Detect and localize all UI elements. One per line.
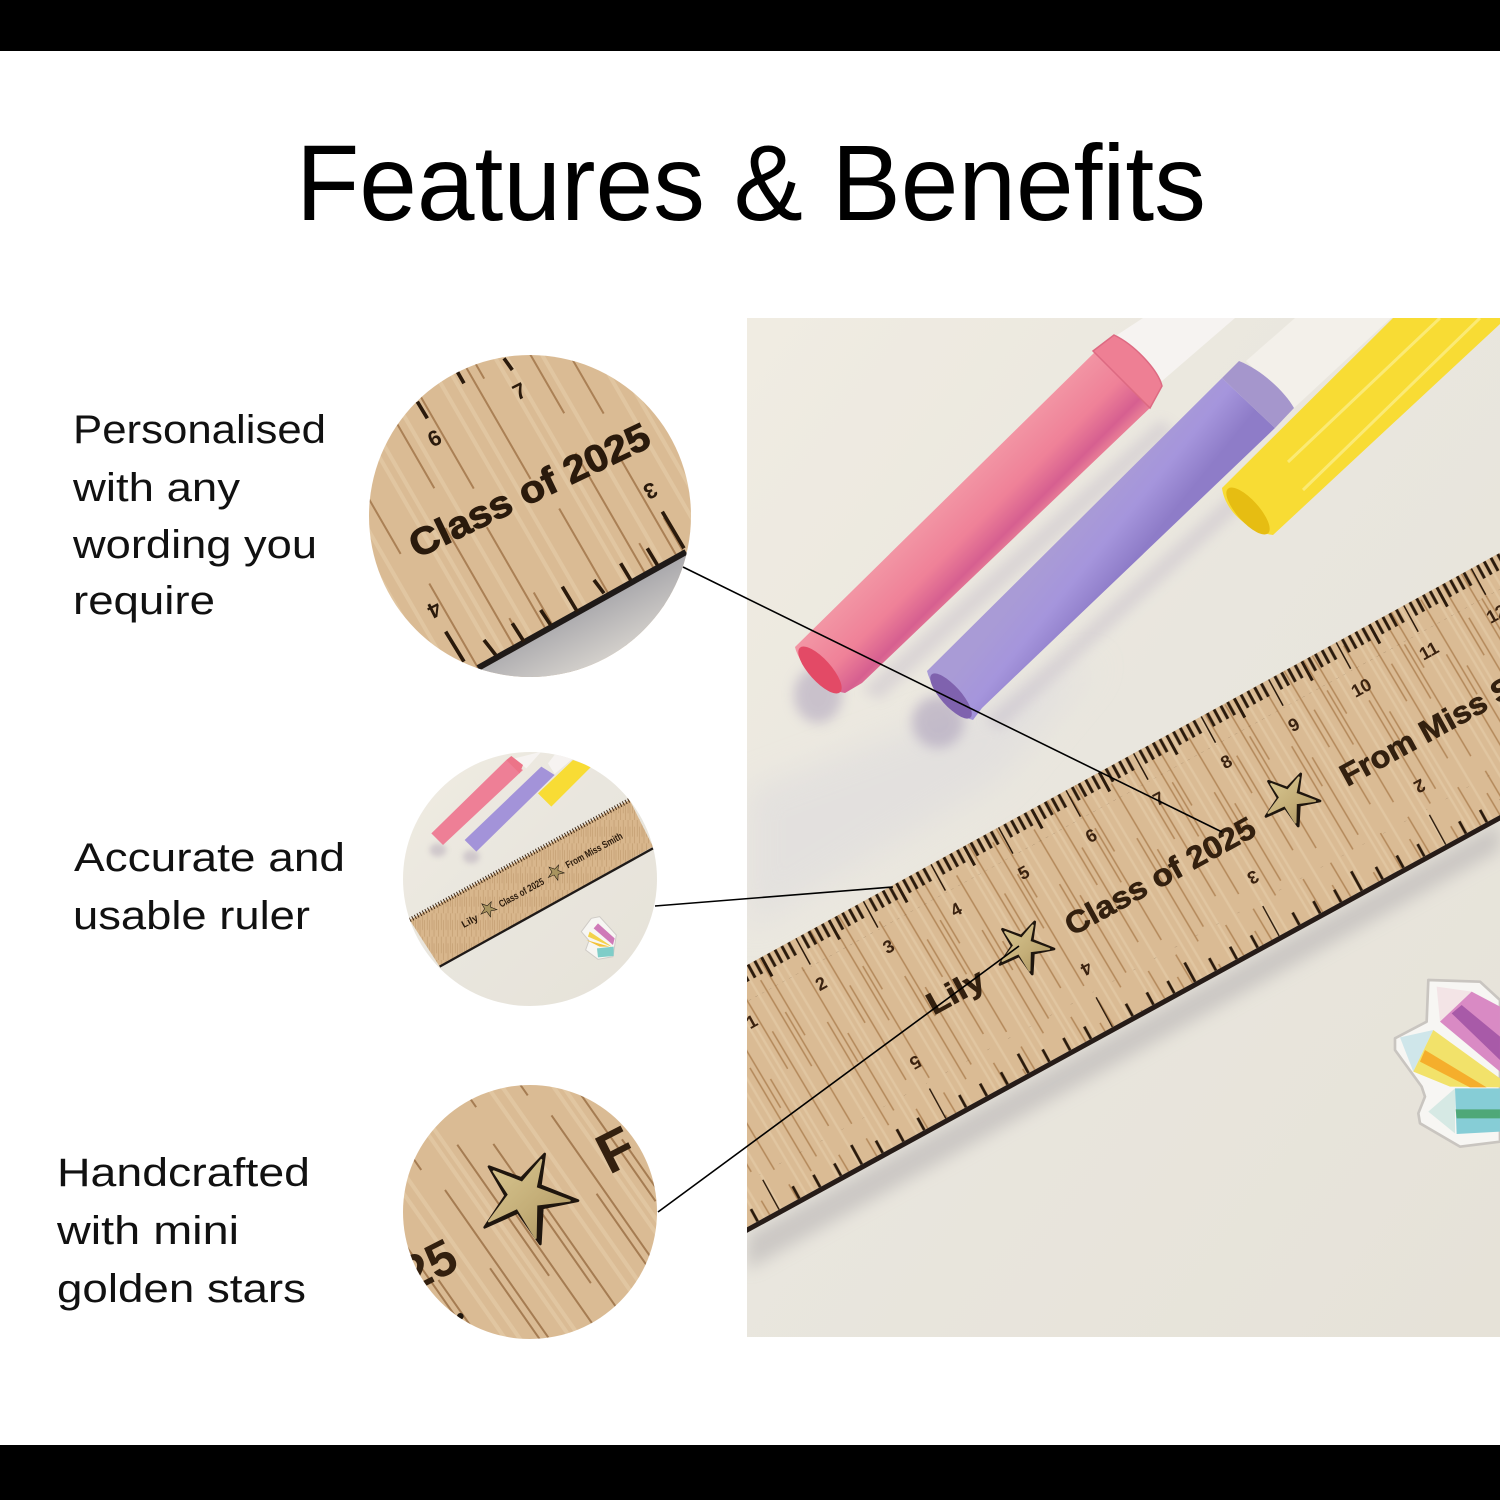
top scale numbers: 7 [1150,788,1168,810]
cool shadow area around ruler [768,761,899,880]
circle: whole ruler view [403,752,658,1007]
top scale numbers [743,600,1500,1033]
label: personalised: Personalised [73,408,326,452]
label: accurate ruler: Accurate and [74,836,345,880]
label: personalised: wording you [72,523,317,567]
top scale numbers: 6 [1082,825,1100,847]
bottom scale numbers [906,775,1429,1073]
label: personalised: require [73,579,215,623]
bottom scale numbers: 4 [1077,957,1096,980]
top scale numbers: 1 [743,1010,761,1033]
icon: yellow pen [1220,318,1500,541]
top scale numbers: 10 [1348,674,1375,701]
top scale numbers: 11 [1416,638,1442,664]
circle: Class of 2025 close-up: 6 [423,424,446,452]
engraved text: Class of 2025: Class of 2025 [1059,810,1261,942]
circle: whole ruler view: From Miss Smith [564,831,625,871]
title: Features & Benefits [296,122,1206,243]
label: golden stars: golden stars [57,1267,306,1311]
top scale numbers: 4 [947,899,965,921]
circle: whole ruler view: Class of 2025 [497,876,547,910]
top scale numbers: 8 [1217,751,1236,773]
callout line: accurate ruler [655,887,893,906]
label: golden stars: Handcrafted [57,1151,310,1195]
icon: pink pen [792,318,1235,700]
ruler shadow [747,822,1500,1270]
bottom scale numbers: 3 [1244,866,1262,888]
ruler [747,552,1500,1233]
bottom scale numbers: 2 [1410,775,1429,797]
icon: rainbow sticker [1395,980,1500,1147]
icon: gold star left [1000,922,1054,974]
circle: Class of 2025 close-up: 3 [639,477,662,505]
bottom scale numbers: 5 [906,1051,925,1073]
label: personalised: with any [72,466,240,510]
label: golden stars: with mini [56,1209,239,1253]
circle: whole ruler view: Lily [460,913,481,931]
circle: gold star close-up: F [587,1115,646,1187]
top scale numbers: 2 [812,973,830,995]
callout line: personalised [683,567,1222,832]
label: accurate ruler: usable ruler [73,894,310,938]
icon: gold star right [1266,774,1320,826]
top scale numbers: 3 [879,936,898,958]
top black band [0,0,1500,51]
top scale numbers: 5 [1015,862,1033,884]
pen shadows [790,422,1235,752]
circle: Class of 2025 close-up: 4 [423,596,446,624]
engraved name: Lily: Lily [920,961,991,1022]
circle: Class of 2025 close-up: Class of 2025 [403,416,657,567]
icon: lavender pen [924,318,1391,724]
circle: Class of 2025 close-up [369,355,700,690]
circle: gold star close-up [391,1085,658,1340]
callout line: golden stars [658,946,1019,1212]
circle: gold star close-up: 25 [391,1228,466,1303]
photo panel: ruler and pens [747,318,1500,1337]
bottom black band [0,1445,1500,1500]
circle: Class of 2025 close-up: 7 [508,377,531,405]
top scale numbers: 9 [1285,714,1303,736]
